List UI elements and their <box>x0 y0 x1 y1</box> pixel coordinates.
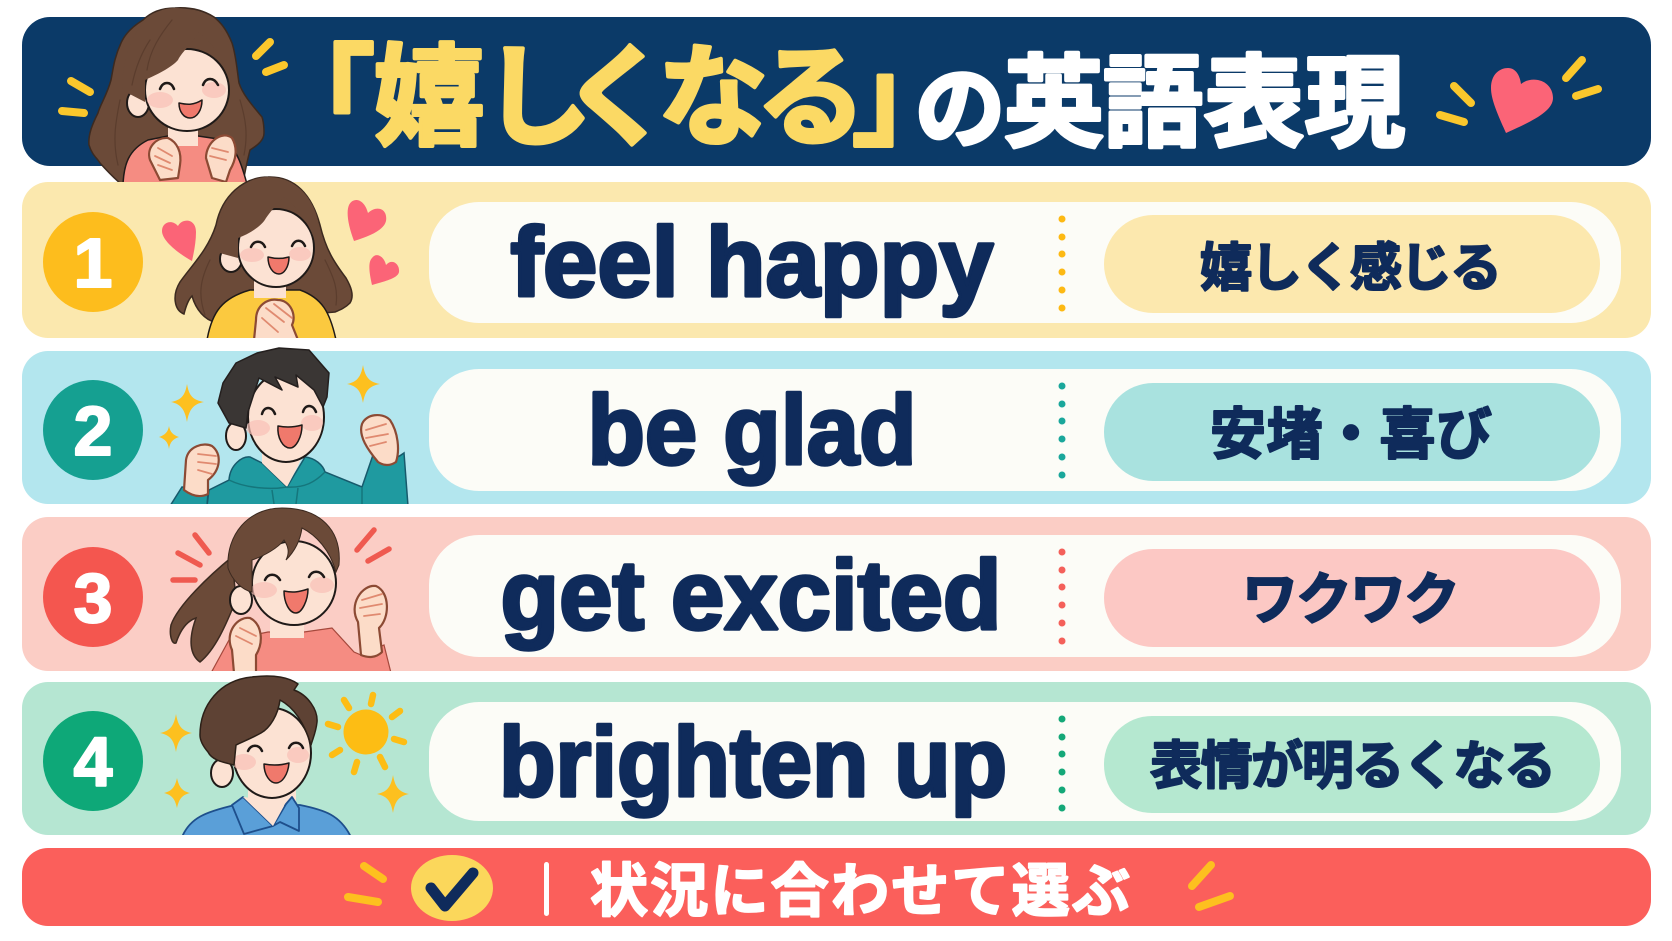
phrase pill <box>429 702 1621 821</box>
meaning pill <box>1104 215 1600 313</box>
icon: sparkles <box>160 714 409 813</box>
number badge 4: 4 <box>74 723 113 801</box>
icon: heart with sparks <box>1440 60 1598 133</box>
divider bar <box>544 862 549 916</box>
meaning pill: 安堵・喜び <box>1210 403 1492 466</box>
title text <box>265 37 1405 160</box>
title text: の <box>915 60 1005 160</box>
meaning pill: 表情が明るくなる <box>1150 738 1556 796</box>
icon: footer left sparks <box>348 866 383 902</box>
icon: check badge <box>411 855 493 921</box>
number badge 2 <box>43 380 143 480</box>
phrase pill <box>429 535 1621 657</box>
panel: row 2 be glad <box>22 351 1651 504</box>
number badge 4 <box>43 711 143 811</box>
illustration: boy in blue shirt <box>182 676 351 837</box>
meaning pill <box>1104 716 1600 813</box>
panel: row 4 brighten up <box>22 682 1651 835</box>
number badge 3 <box>43 547 143 647</box>
illustration: boy in teal hoodie <box>170 348 408 506</box>
title banner <box>22 17 1651 166</box>
english phrase: brighten up <box>499 707 1007 817</box>
footer text: 状況に合わせて選ぶ <box>590 859 1130 924</box>
icon: excitement rays <box>173 530 389 580</box>
panel: row 1 feel happy <box>22 182 1651 338</box>
illustration: cheering girl in header <box>89 8 264 184</box>
illustration: girl with clasped hands <box>175 177 352 340</box>
english phrase: feel happy <box>510 207 994 317</box>
number badge 1 <box>43 212 143 312</box>
phrase pill <box>429 369 1621 491</box>
meaning pill: ワクワク <box>1242 568 1460 631</box>
icon: sparkles <box>159 365 380 449</box>
meaning pill: 嬉しく感じる <box>1200 240 1502 298</box>
callout: footer bar <box>22 848 1651 926</box>
icon: footer right sparks <box>1192 865 1230 907</box>
dotted divider <box>1058 216 1066 312</box>
dotted divider <box>1058 716 1066 812</box>
icon: header sparks left <box>62 42 284 113</box>
dotted divider <box>1058 548 1066 644</box>
meaning pill <box>1104 383 1600 481</box>
dotted divider <box>1058 382 1066 478</box>
illustration: ponytail girl cheering <box>170 508 391 673</box>
icon: hearts <box>162 200 399 285</box>
number badge 1: 1 <box>74 224 112 302</box>
number badge 2: 2 <box>74 392 112 470</box>
title text: 「嬉しくなる」 <box>265 37 962 160</box>
english phrase: be glad <box>588 375 916 485</box>
title text: 英語表現 <box>1004 48 1405 160</box>
english phrase: get excited <box>500 540 1002 650</box>
panel: row 3 get excited <box>22 517 1651 671</box>
phrase pill <box>429 202 1621 323</box>
number badge 3: 3 <box>74 559 112 637</box>
icon: sun <box>328 695 404 772</box>
meaning pill <box>1104 549 1600 647</box>
